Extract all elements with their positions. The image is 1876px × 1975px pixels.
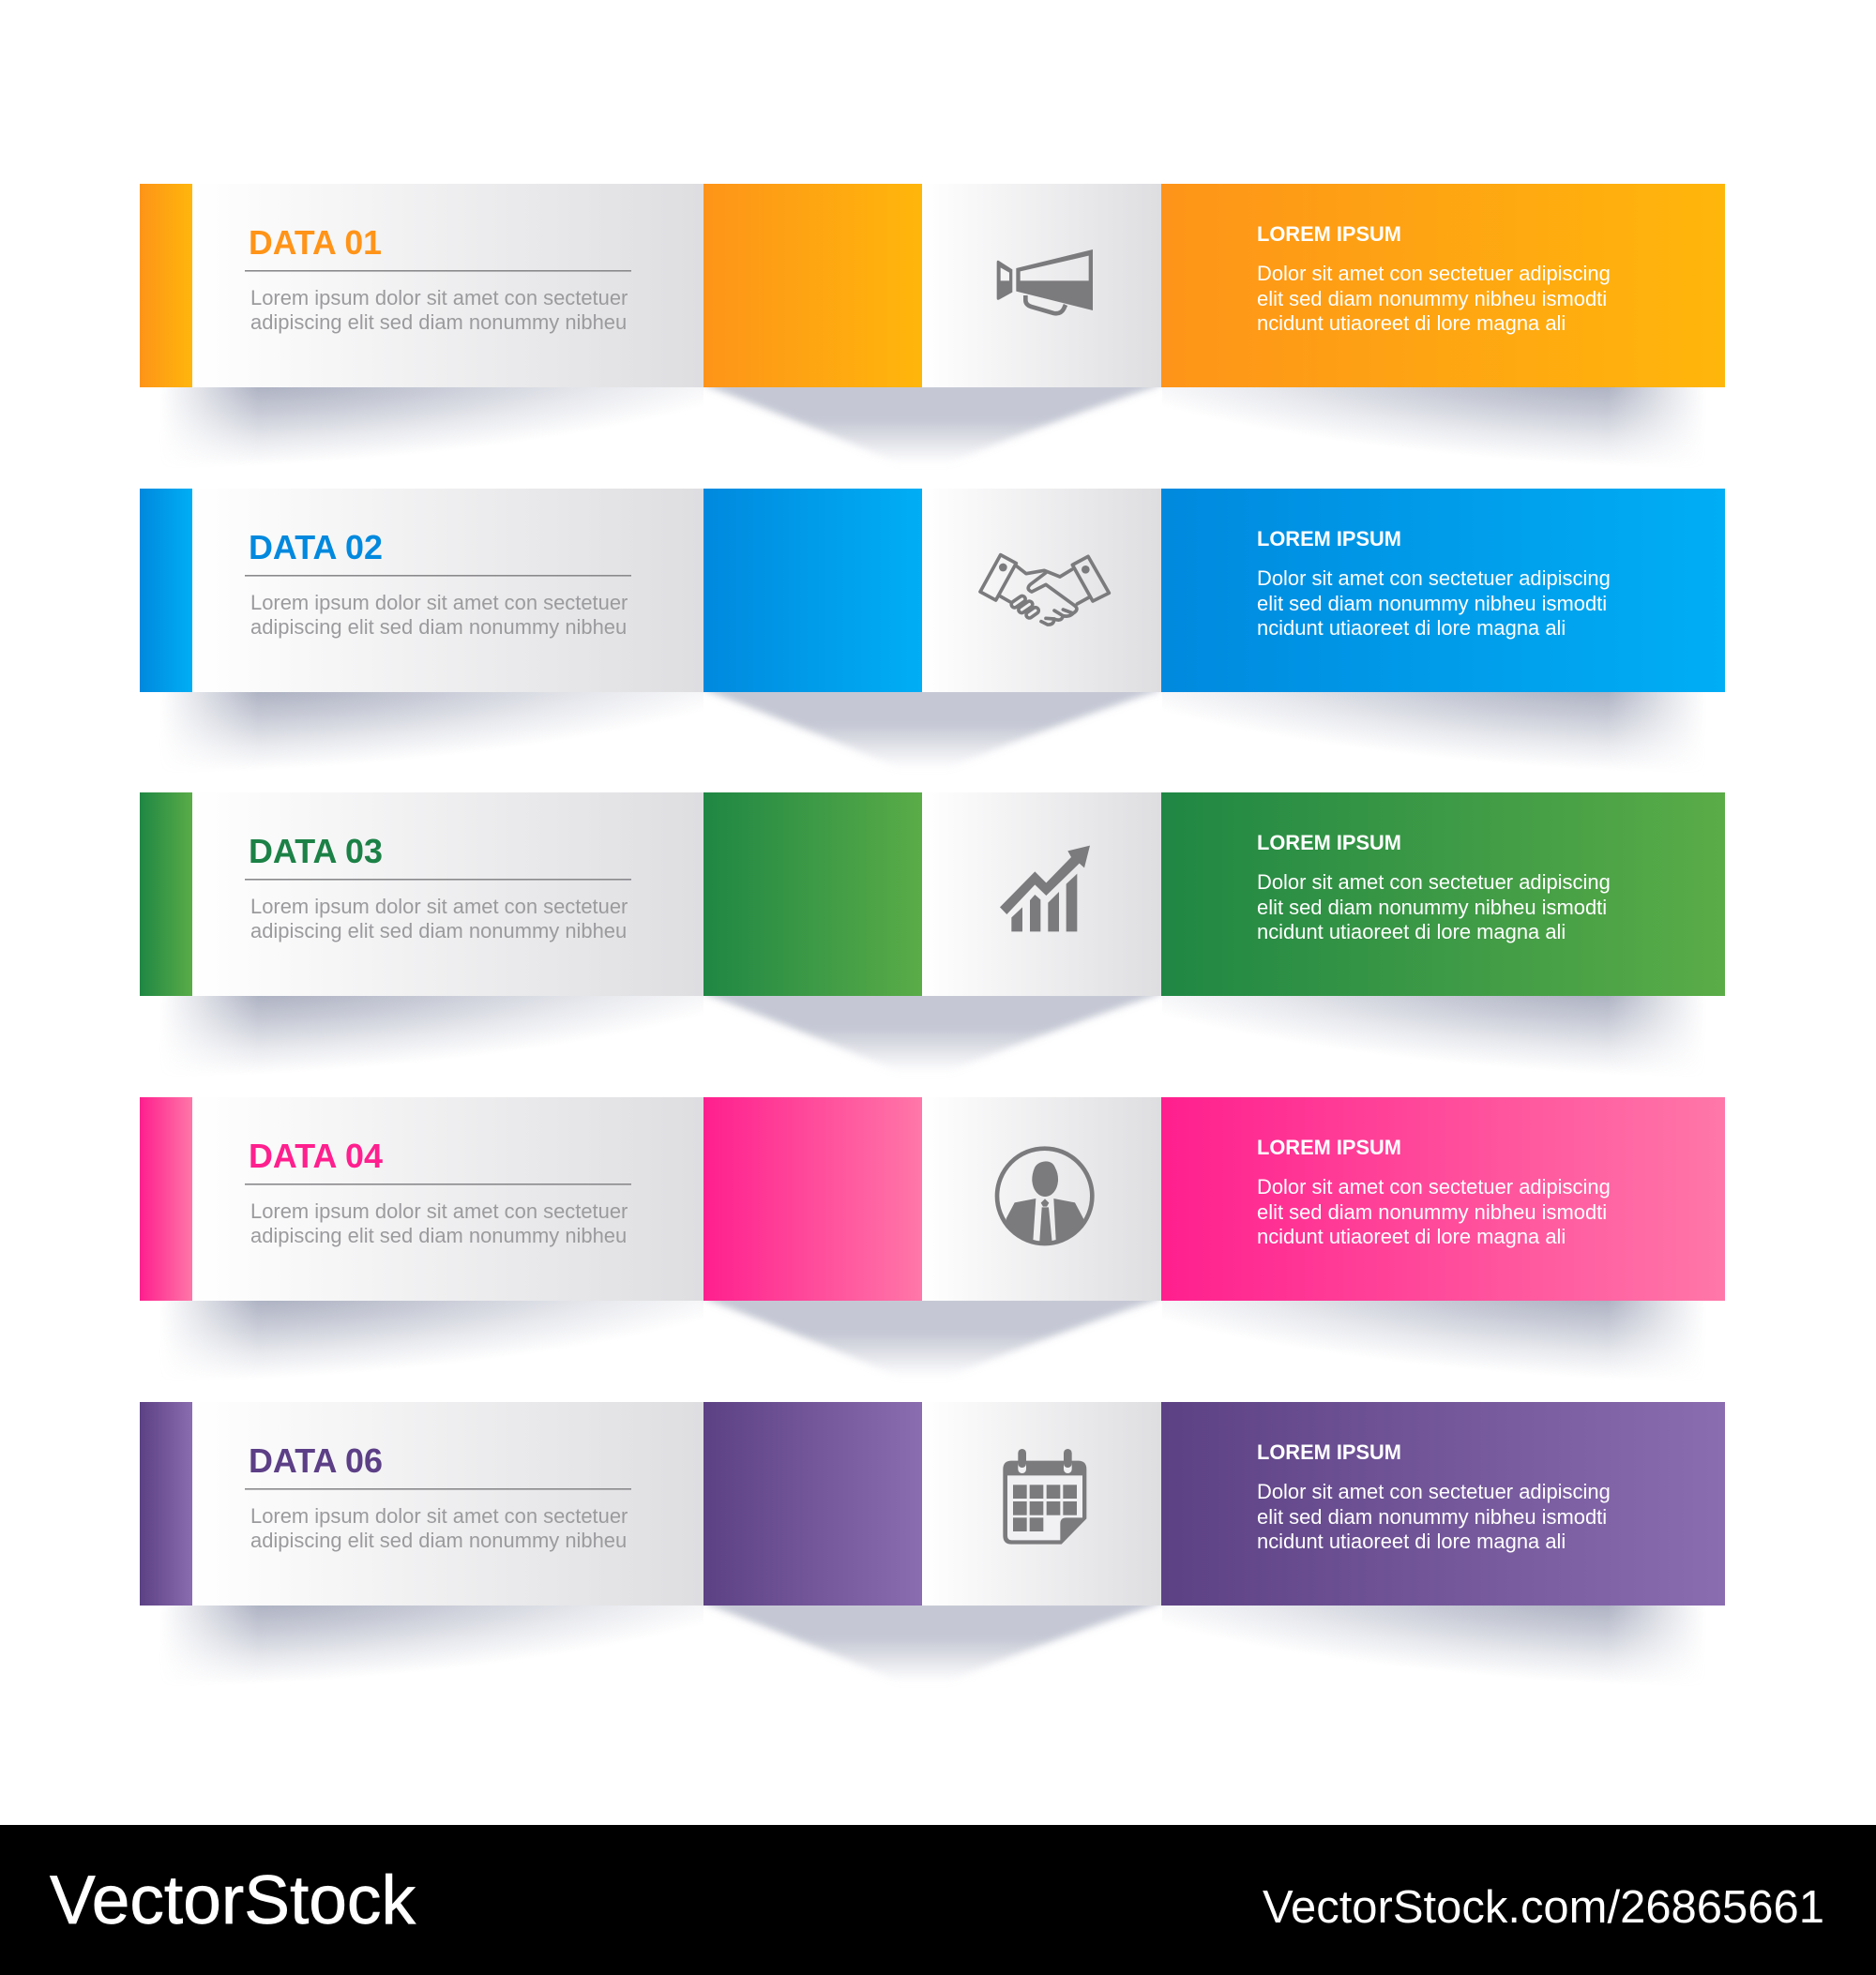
text block: left description 03: Lorem ipsum dolor sit amet con sectetuer [250, 895, 628, 918]
ribbon: row 5 [140, 1402, 1725, 1606]
row 2: data 02 [140, 489, 1725, 786]
text block: lorem ipsum 06: elit sed diam nonummy nibheu ismodti [1257, 1505, 1607, 1529]
text block: left description 02: Lorem ipsum dolor sit amet con sectetuer [250, 591, 628, 614]
text block: left description 02: adipiscing elit sed diam nonummy nibheu [250, 615, 627, 639]
shadow: row 3 [141, 988, 1725, 1090]
ribbon: row 4 [140, 1097, 1725, 1301]
ribbon: row 1 [140, 184, 1725, 387]
ribbon: row 2 [140, 489, 1725, 692]
text block: left description 06: Lorem ipsum dolor sit amet con sectetuer [250, 1504, 628, 1528]
text block: lorem ipsum 03: LOREM IPSUM [1257, 831, 1401, 854]
shadow: row 5 [141, 1598, 1725, 1699]
text block: lorem ipsum 02: Dolor sit amet con sectetuer adipiscing [1257, 566, 1611, 590]
row 3: data 03 [140, 792, 1725, 1090]
text block: lorem ipsum 04 [1257, 1136, 1611, 1248]
footer band [0, 1825, 1876, 1975]
shadow: row 1 [141, 380, 1725, 481]
ribbon: row 3 [140, 792, 1725, 996]
text block: lorem ipsum 03 [1257, 831, 1611, 943]
heading: data 04: DATA 04 [249, 1137, 383, 1175]
text block: lorem ipsum 01: elit sed diam nonummy nibheu ismodti [1257, 287, 1607, 310]
text block: lorem ipsum 03: elit sed diam nonummy nibheu ismodti [1257, 896, 1607, 919]
row 4: data 04 [140, 1097, 1725, 1395]
text block: lorem ipsum 01: ncidunt utiaoreet di lore magna ali [1257, 311, 1566, 335]
text block: lorem ipsum 06 [1257, 1440, 1611, 1553]
icon: megaphone [997, 249, 1093, 313]
text block: left description 06: adipiscing elit sed diam nonummy nibheu [250, 1529, 627, 1552]
text block: lorem ipsum 03: Dolor sit amet con sectetuer adipiscing [1257, 870, 1611, 894]
text block: lorem ipsum 06: Dolor sit amet con sectetuer adipiscing [1257, 1480, 1611, 1503]
text block: lorem ipsum 03: ncidunt utiaoreet di lore magna ali [1257, 920, 1566, 943]
text block: lorem ipsum 04: ncidunt utiaoreet di lore magna ali [1257, 1225, 1566, 1248]
icon: growth chart [1000, 846, 1090, 931]
text block: left description 03: adipiscing elit sed diam nonummy nibheu [250, 919, 627, 942]
heading: data 06: DATA 06 [249, 1441, 383, 1480]
icon: calendar [1003, 1449, 1086, 1545]
text block: lorem ipsum 02: elit sed diam nonummy nibheu ismodti [1257, 592, 1607, 615]
heading: data 01: DATA 01 [249, 223, 382, 262]
text block: lorem ipsum 02: LOREM IPSUM [1257, 527, 1401, 550]
text block: lorem ipsum 01: LOREM IPSUM [1257, 222, 1401, 246]
text block: left description 04: adipiscing elit sed diam nonummy nibheu [250, 1224, 627, 1247]
row 5: data 06 [140, 1402, 1725, 1699]
footer url text: VectorStock.com/26865661 [1263, 1882, 1824, 1933]
text block: left description 04: Lorem ipsum dolor sit amet con sectetuer [250, 1199, 628, 1223]
heading: data 02: DATA 02 [249, 528, 383, 566]
text block: lorem ipsum 04: LOREM IPSUM [1257, 1136, 1401, 1159]
row 1: data 01 [140, 184, 1725, 481]
heading: data 03: DATA 03 [249, 832, 383, 870]
text block: lorem ipsum 01: Dolor sit amet con sectetuer adipiscing [1257, 262, 1611, 285]
text block: left description 01: adipiscing elit sed diam nonummy nibheu [250, 310, 627, 334]
footer logo text: VectorStock [50, 1862, 416, 1938]
text block: lorem ipsum 04: Dolor sit amet con sectetuer adipiscing [1257, 1175, 1611, 1199]
shadow: row 4 [141, 1293, 1725, 1395]
text block: lorem ipsum 06: LOREM IPSUM [1257, 1440, 1401, 1464]
text block: lorem ipsum 02: ncidunt utiaoreet di lore magna ali [1257, 616, 1566, 640]
shadow: row 2 [141, 685, 1725, 786]
icon: businessman [997, 1149, 1092, 1245]
text block: lorem ipsum 01 [1257, 222, 1611, 335]
icon: handshake [980, 555, 1109, 625]
text block: lorem ipsum 04: elit sed diam nonummy nibheu ismodti [1257, 1200, 1607, 1224]
text block: lorem ipsum 06: ncidunt utiaoreet di lore magna ali [1257, 1530, 1566, 1553]
text block: left description 01: Lorem ipsum dolor sit amet con sectetuer [250, 286, 628, 309]
text block: lorem ipsum 02 [1257, 527, 1611, 640]
